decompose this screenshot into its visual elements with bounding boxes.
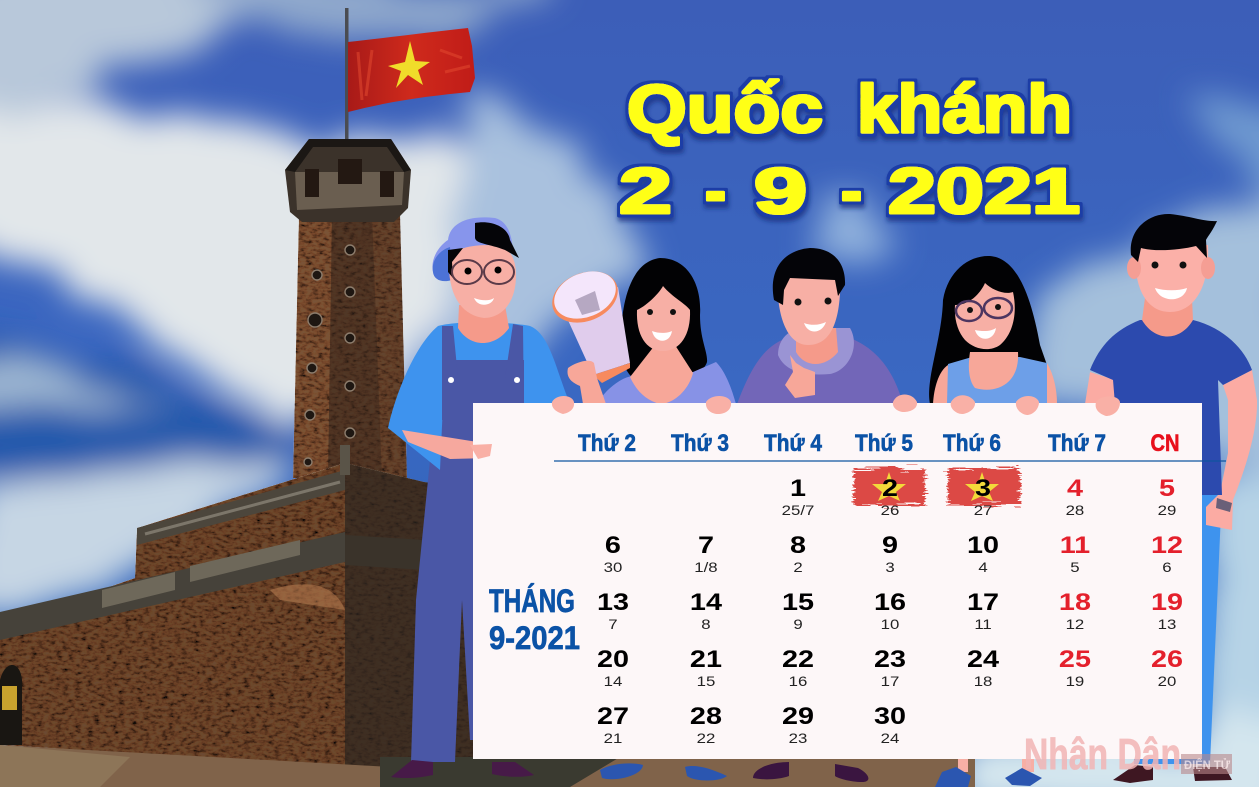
tower and citadel photo (0, 8, 975, 787)
calendar row 4: 17 (881, 674, 899, 690)
calendar row 4: 23 (874, 645, 906, 672)
calendar row 1: 1 (790, 474, 806, 501)
hair (1131, 214, 1217, 262)
hoodie (737, 338, 903, 404)
shirt (597, 362, 736, 404)
calendar row 3: 8 (701, 617, 711, 633)
calendar row 1: 27 (974, 503, 992, 519)
calendar row 4: 14 (604, 674, 623, 690)
calendar row 5: 21 (604, 731, 622, 747)
left arm (1085, 372, 1115, 404)
title: Quốc khánh 2-9-2021: 9 (754, 155, 807, 227)
calendar row 3: 19 (1151, 588, 1183, 615)
weekday headers: CN (1150, 430, 1180, 457)
weekday headers: Thứ 7 (1048, 430, 1106, 457)
holiday flag marker: 3 September (948, 468, 1020, 505)
calendar row 3: 10 (881, 617, 899, 633)
calendar row 5: 22 (697, 731, 715, 747)
calendar row 2: 8 (790, 531, 806, 558)
head (1135, 245, 1208, 312)
balustrades (0, 445, 424, 640)
calendar row 1: 5 (1159, 474, 1175, 501)
arms (933, 363, 1057, 404)
calendar row 2: 12 (1151, 531, 1183, 558)
calendar row 3 (597, 588, 1183, 633)
calendar row 4: 22 (782, 645, 814, 672)
hair (621, 258, 707, 378)
shoes (1113, 765, 1232, 783)
megaphone (544, 262, 630, 383)
calendar row 2: 4 (978, 560, 988, 576)
calendar row 2: 5 (1070, 560, 1080, 576)
sandals (600, 763, 727, 780)
neck (458, 305, 509, 343)
weekday headers: Thứ 2 (578, 430, 636, 457)
sandals (935, 767, 1042, 787)
title: Quốc khánh 2-9-2021 (619, 71, 1080, 227)
calendar row 4 (597, 645, 1183, 690)
character 3: man with hoodie and thumbs-up (737, 248, 903, 782)
shoes (391, 760, 534, 778)
calendar row 2: 2 (793, 560, 803, 576)
title: Quốc khánh 2-9-2021: 2021 (888, 155, 1080, 227)
legs (958, 758, 1034, 772)
title: Quốc khánh 2-9-2021: - (705, 155, 726, 227)
face (637, 286, 690, 351)
calendar row 2: 11 (1060, 531, 1090, 558)
trousers (1134, 490, 1222, 764)
ground (0, 745, 975, 787)
calendar row 3: 17 (967, 588, 999, 615)
calendar row 1: 3 (975, 474, 991, 501)
wristwatch (1216, 498, 1232, 512)
month label: THÁNG (489, 583, 575, 619)
title: Quốc khánh 2-9-2021: - (841, 155, 862, 227)
calendar row 2: 9 (882, 531, 898, 558)
chest (630, 345, 693, 404)
eyes (464, 266, 502, 274)
legs and overalls (411, 360, 524, 762)
calendar row 5: 28 (690, 702, 722, 729)
flag tower shaft (293, 212, 407, 478)
calendar row 5: 23 (789, 731, 807, 747)
calendar row 5: 29 (782, 702, 814, 729)
citadel walls (0, 463, 480, 775)
calendar row 2: 6 (605, 531, 621, 558)
calendar row 5: 24 (881, 731, 900, 747)
raised fist and arm (568, 361, 606, 404)
character 4: woman with glasses and long hair (929, 256, 1057, 787)
head (777, 265, 840, 345)
flag pole (345, 8, 348, 140)
T-shirt (1090, 320, 1252, 495)
calendar row 5: 30 (874, 702, 906, 729)
tower lantern head (285, 139, 411, 222)
thumbs-up hand (785, 355, 815, 398)
calendar row 3: 7 (608, 617, 618, 633)
calendar row 3: 15 (782, 588, 814, 615)
calendar row 3: 12 (1066, 617, 1084, 633)
glasses (956, 298, 1012, 321)
calendar row 4: 20 (1158, 674, 1176, 690)
right arm (1206, 370, 1257, 530)
calendar panel (473, 403, 1226, 759)
calendar row 4: 15 (697, 674, 715, 690)
calendar row 4: 24 (967, 645, 999, 672)
calendar row 3: 16 (874, 588, 906, 615)
calendar row 3: 14 (690, 588, 722, 615)
calendar row 1: 2 (882, 474, 898, 501)
title: Quốc khánh 2-9-2021: khánh (857, 71, 1072, 147)
character 1: man with cap and overalls (388, 217, 570, 778)
weekday headers: Thứ 5 (855, 430, 913, 457)
calendar row 4: 19 (1066, 674, 1084, 690)
glasses (452, 260, 514, 284)
neck (796, 328, 838, 364)
calendar row 1: 26 (881, 503, 899, 519)
calendar row 1 (782, 474, 1176, 519)
character 5: man in blue T-shirt (1085, 214, 1257, 783)
calendar row 4: 18 (974, 674, 992, 690)
month label (489, 583, 580, 656)
weekday headers (578, 430, 1180, 457)
calendar row 2: 3 (885, 560, 895, 576)
long hair (929, 256, 1047, 404)
hands gripping the top of the calendar (470, 394, 1120, 459)
weekday headers: Thứ 3 (671, 430, 729, 457)
hair at side (448, 248, 463, 278)
calendar row 1: 29 (1158, 503, 1176, 519)
panel rule line (554, 460, 1226, 462)
calendar row 2: 30 (604, 560, 622, 576)
calendar row 4: 25 (1059, 645, 1091, 672)
flag: red with yellow star (348, 28, 475, 112)
top (947, 357, 1047, 404)
calendar row 1: 25/7 (782, 503, 814, 519)
calendar row 4: 16 (789, 674, 807, 690)
hair (773, 248, 845, 305)
mouth (474, 298, 494, 305)
face (955, 283, 1015, 349)
calendar row 3: 11 (974, 617, 992, 633)
calendar row 1: 28 (1066, 503, 1084, 519)
calendar row 2: 6 (1162, 560, 1172, 576)
arched gate and sign (0, 665, 22, 745)
month label: 9-2021 (489, 620, 580, 656)
holiday flag marker: 2 September (854, 468, 925, 505)
arm (402, 430, 490, 459)
calendar row 5 (597, 702, 906, 747)
cap (432, 217, 513, 281)
shirt (388, 322, 570, 470)
weekday headers: Thứ 4 (764, 430, 823, 457)
watermark: Nhân Dân điện tử: ĐIỆN TỬ (1184, 757, 1230, 772)
calendar row 2: 7 (698, 531, 714, 558)
character 2: woman with megaphone (544, 258, 736, 780)
shoes (753, 762, 868, 782)
calendar row 1: 4 (1067, 474, 1083, 501)
head (449, 245, 516, 318)
neck (1142, 298, 1193, 336)
watermark: Nhân Dân điện tử: Nhân Dân (1024, 730, 1181, 779)
title: Quốc khánh 2-9-2021: Quốc (627, 71, 823, 147)
calendar row 4: 26 (1151, 645, 1183, 672)
calendar row 3: 18 (1059, 588, 1091, 615)
calendar row 4: 21 (690, 645, 722, 672)
title: Quốc khánh 2-9-2021: 2 (619, 155, 672, 227)
calendar row 2 (604, 531, 1183, 576)
tower windows and holes (304, 245, 355, 466)
calendar row 2: 10 (967, 531, 999, 558)
calendar row 4: 20 (597, 645, 629, 672)
weekday headers: Thứ 6 (943, 430, 1001, 457)
calendar row 3: 13 (1158, 617, 1176, 633)
calendar row 3: 9 (793, 617, 803, 633)
calendar row 2: 1/8 (694, 560, 718, 576)
calendar row 3: 13 (597, 588, 629, 615)
calendar row 5: 27 (597, 702, 629, 729)
calendar numbers (597, 474, 1183, 747)
